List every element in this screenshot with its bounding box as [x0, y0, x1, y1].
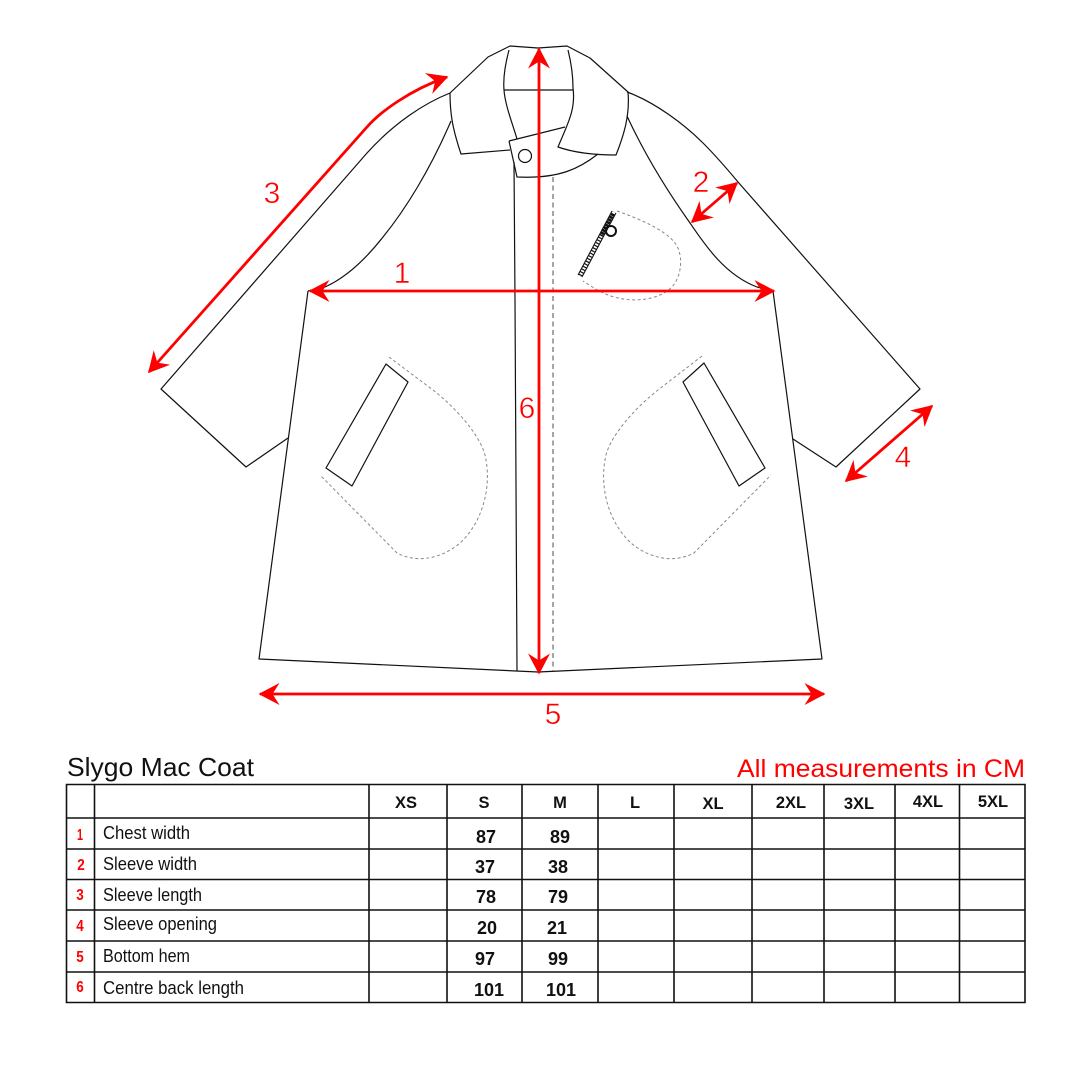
arrow 4: sleeve opening — [846, 406, 932, 481]
table grid — [66, 784, 1025, 1002]
left pocket outline — [320, 357, 487, 559]
row labels: Bottom hem — [103, 945, 190, 966]
size headers: 3XL — [844, 795, 874, 813]
front placket — [514, 162, 517, 671]
row labels: Centre back length — [103, 977, 244, 998]
size table — [66, 784, 1025, 1002]
size S values: 78 — [476, 887, 496, 907]
size headers: 2XL — [776, 794, 806, 812]
size headers: L — [630, 794, 640, 812]
size M values — [546, 827, 576, 1000]
row labels: Chest width — [103, 822, 190, 843]
row numbers: 6 — [76, 979, 84, 996]
size S values: 87 — [476, 827, 496, 847]
size headers: 4XL — [913, 793, 943, 811]
coat technical drawing — [161, 46, 920, 672]
size headers: 5XL — [978, 793, 1008, 811]
size S values — [474, 827, 504, 1000]
row numbers: 1 — [77, 827, 83, 844]
chest pocket outline — [583, 211, 681, 300]
size S values: 101 — [474, 980, 504, 1000]
right pocket outline — [604, 356, 771, 559]
row numbers — [76, 827, 85, 996]
row numbers: 4 — [76, 918, 84, 935]
size M values: 38 — [548, 857, 568, 877]
row labels — [103, 822, 244, 998]
size headers: XS — [395, 794, 417, 812]
size headers — [395, 793, 1008, 813]
size M values: 21 — [547, 918, 567, 938]
size headers: M — [553, 794, 567, 812]
number 4: 4 — [895, 441, 911, 474]
collar — [450, 46, 628, 155]
table title: Slygo Mac Coat — [67, 752, 255, 782]
row labels: Sleeve width — [103, 853, 197, 874]
number 6: 6 — [519, 392, 535, 425]
row numbers: 2 — [77, 857, 85, 874]
size S values: 37 — [475, 857, 495, 877]
number 5: 5 — [545, 698, 561, 731]
button — [518, 150, 532, 162]
number 3: 3 — [264, 177, 280, 210]
row labels: Sleeve opening — [103, 913, 217, 934]
size headers: XL — [702, 795, 724, 813]
row numbers: 5 — [76, 949, 84, 966]
row numbers: 3 — [76, 887, 84, 904]
size S values: 20 — [477, 918, 497, 938]
row labels: Sleeve length — [103, 884, 202, 905]
chest pocket zipper — [580, 212, 616, 276]
left sleeve — [161, 93, 451, 467]
arrow 2: sleeve width — [692, 166, 737, 222]
right sleeve — [627, 92, 920, 467]
left pocket flap — [326, 364, 408, 486]
placket stitching — [552, 177, 554, 671]
size M values: 101 — [546, 980, 576, 1000]
size S values: 97 — [475, 949, 495, 969]
collar tab with button — [509, 127, 598, 177]
number 2: 2 — [693, 166, 709, 199]
size headers: S — [478, 794, 490, 812]
size M values: 89 — [550, 827, 570, 847]
right pocket flap — [683, 363, 765, 486]
coat body — [259, 291, 822, 672]
size M values: 79 — [548, 887, 568, 907]
size M values: 99 — [548, 949, 568, 969]
arrow 3: sleeve length — [149, 77, 447, 372]
measurement unit note: All measurements in CM — [737, 755, 1025, 783]
number 1: 1 — [394, 257, 410, 290]
